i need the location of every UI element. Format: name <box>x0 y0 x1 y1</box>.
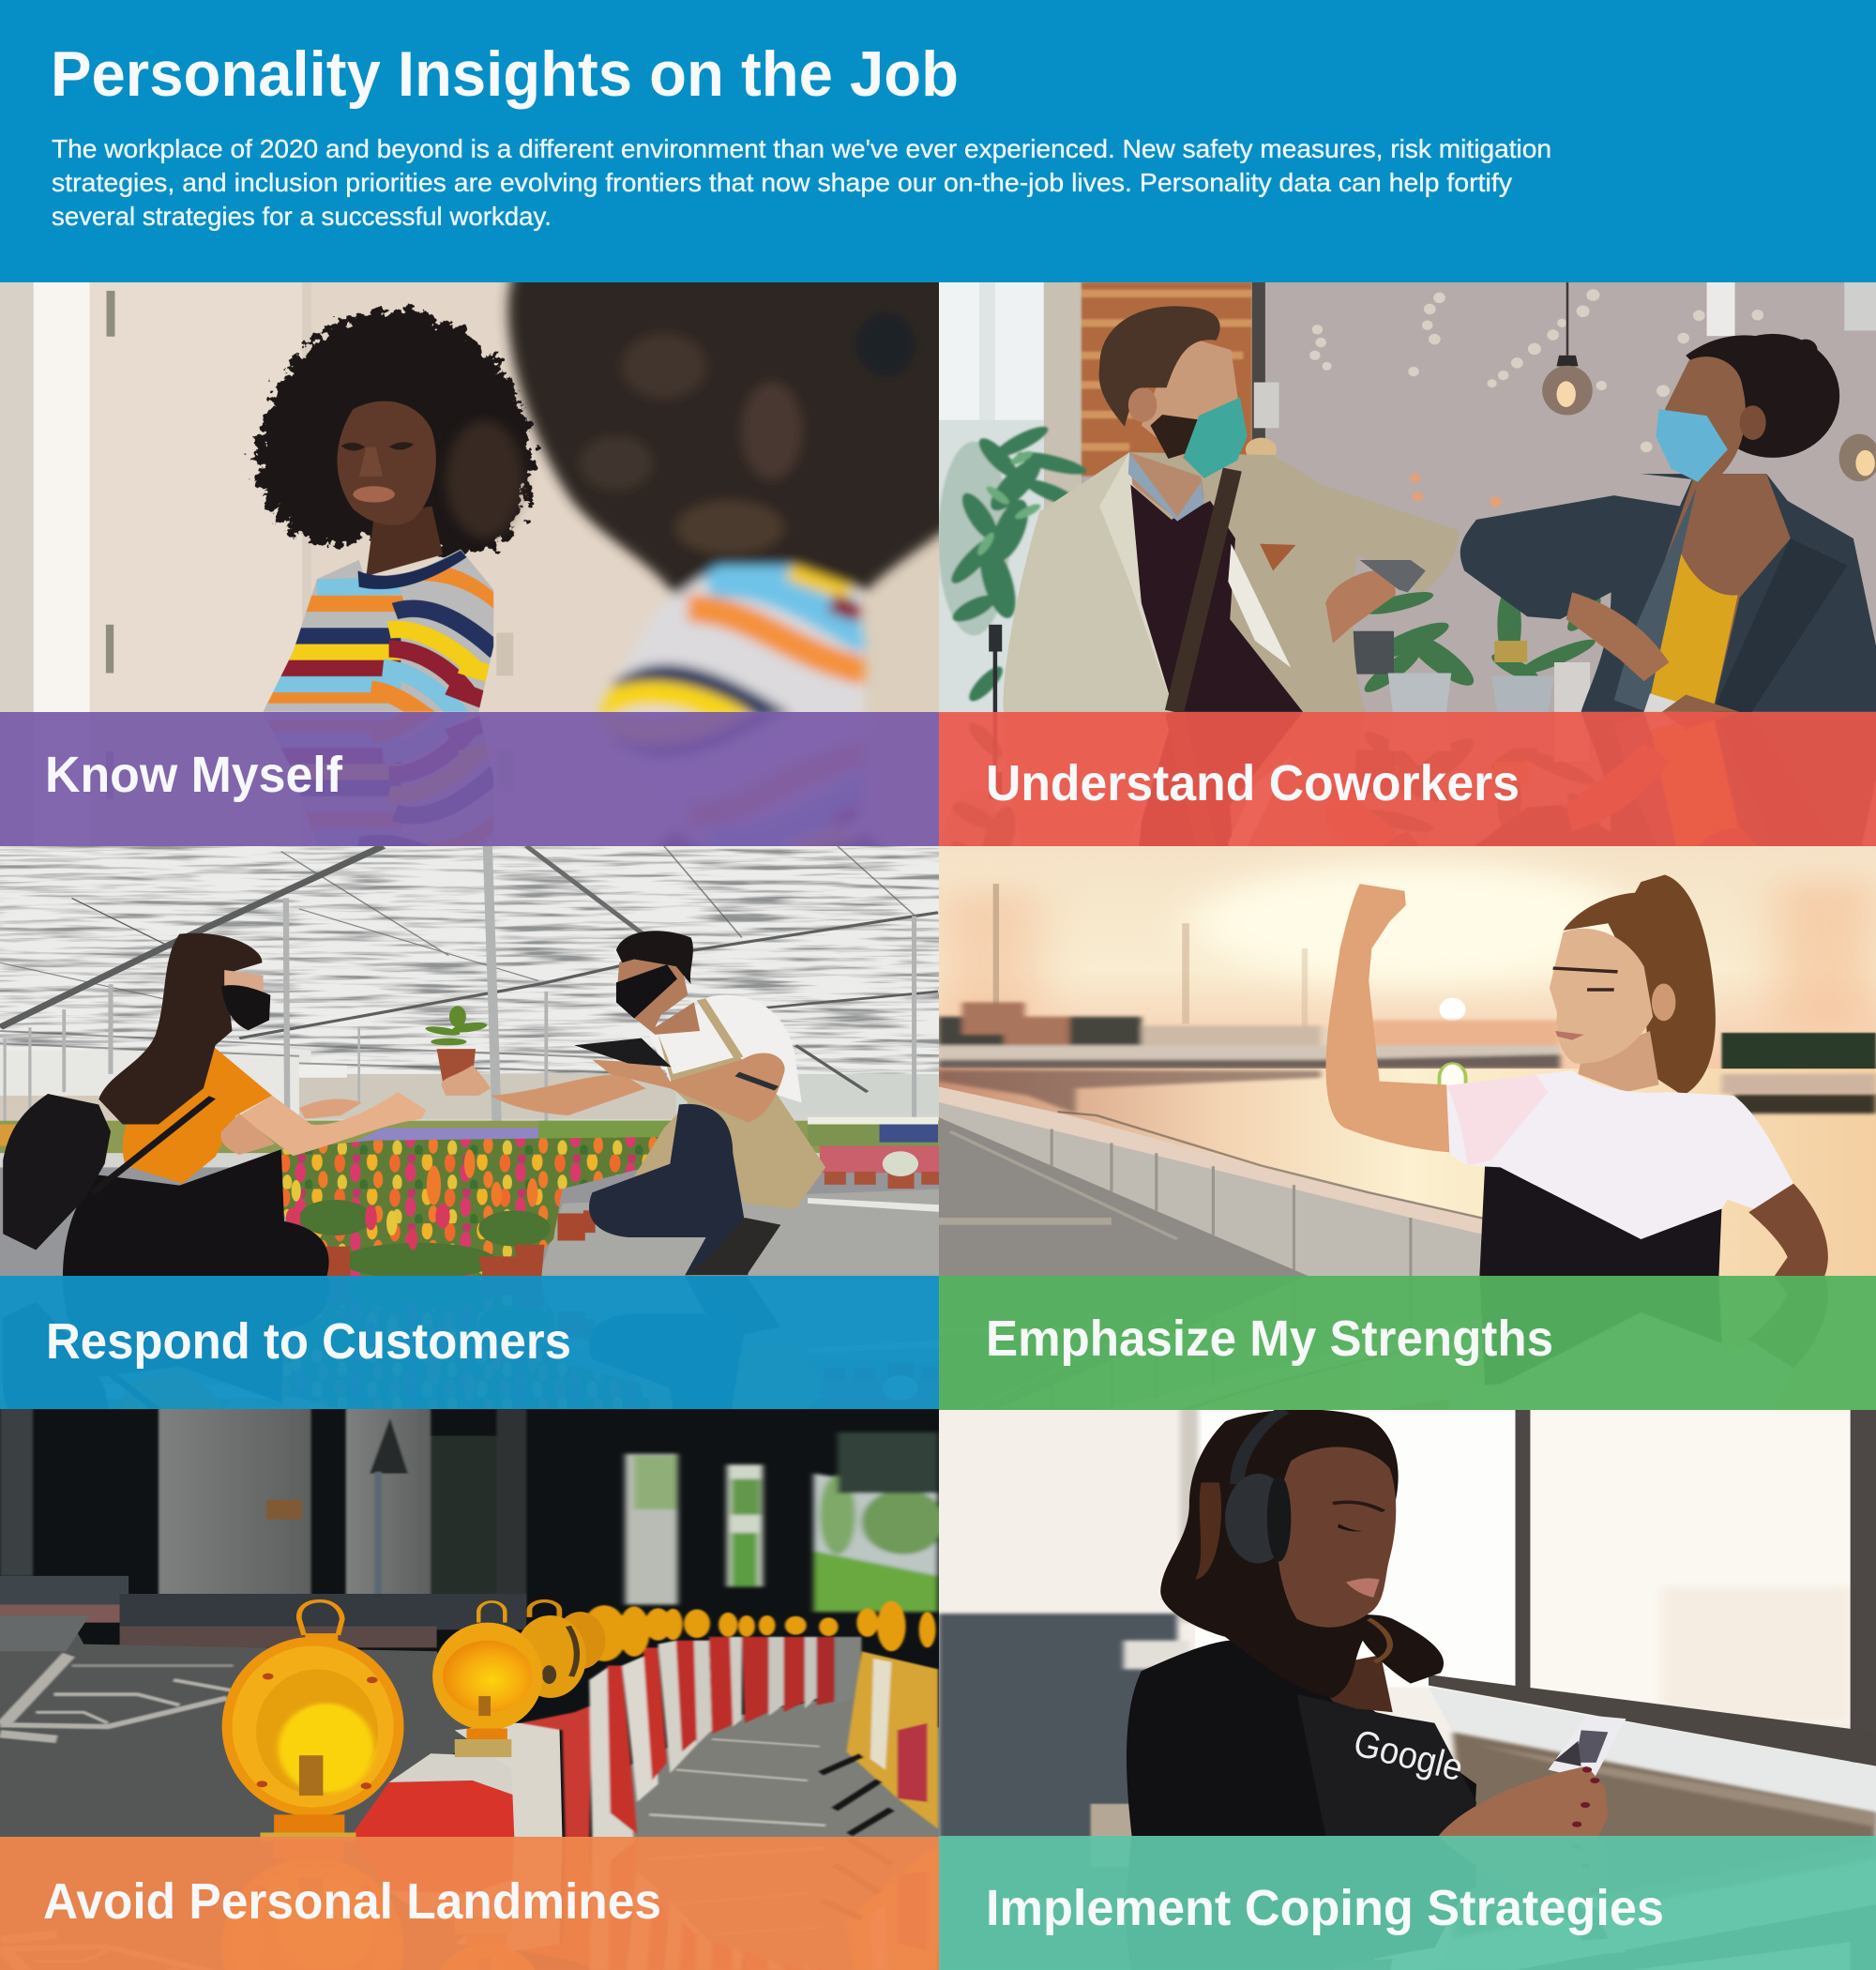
label bar <box>0 1276 939 1409</box>
openings <box>626 1432 946 1612</box>
face <box>1277 1447 1396 1628</box>
reflection under label <box>0 1276 939 1409</box>
photo: customer and florist in greenhouse <box>0 844 946 1279</box>
lights <box>1309 289 1763 452</box>
sharp afro <box>256 309 532 558</box>
label bar <box>0 1837 939 1970</box>
plant in pot <box>424 1006 489 1045</box>
plant left <box>938 421 1088 705</box>
photo: man and woman in masks elbow bump <box>938 282 1876 714</box>
right-hand yellow fence <box>821 1651 938 1834</box>
woman customer <box>63 1149 329 1279</box>
floor <box>0 1167 946 1279</box>
backpack <box>3 1094 111 1250</box>
panel: implement coping strategies <box>938 1407 1876 1970</box>
mask: teal <box>1183 398 1248 478</box>
other arm <box>1748 1184 1828 1279</box>
chest and neckline <box>1309 1655 1393 1712</box>
neck <box>366 507 443 576</box>
potted plants <box>1359 587 1606 698</box>
blurred reflection <box>508 269 969 721</box>
face <box>337 402 436 525</box>
panel: emphasize my strengths <box>938 844 1876 1410</box>
promenade wall <box>938 1086 1489 1279</box>
shirt logo: Google <box>1350 1722 1467 1789</box>
reflection under label <box>939 712 1876 846</box>
heading: Implement Coping Strategies <box>986 1880 1664 1936</box>
label bar <box>939 1836 1876 1970</box>
heading: Avoid Personal Landmines <box>43 1873 661 1930</box>
title: Personality Insights on the Job <box>51 38 959 110</box>
barrier row <box>347 1781 515 1841</box>
intro text <box>52 134 1551 231</box>
reflection under label <box>0 712 939 846</box>
label bar <box>939 1276 1876 1410</box>
water <box>938 1068 1876 1280</box>
headphones <box>1237 1410 1285 1484</box>
label bar <box>0 712 939 846</box>
road <box>0 1623 478 1841</box>
photo: woman with headphones looking at phone by a window <box>938 1407 1876 1843</box>
guard rail <box>0 1576 129 1608</box>
intro text: The workplace of 2020 and beyond is a different environment than we've ever experienced. New safety measures, risk mitigation <box>52 134 1551 163</box>
city skyline <box>938 1002 1560 1068</box>
hair <box>1160 1409 1444 1698</box>
label bar <box>939 712 1876 846</box>
roof beams <box>0 846 938 1092</box>
sidewalk <box>598 1694 946 1841</box>
hand and phone <box>1549 1715 1626 1781</box>
reflection under label <box>0 1837 939 1970</box>
photo: amber warning beacons on road barriers <box>0 1407 946 1841</box>
beacon 3 <box>515 1601 605 1698</box>
distant beacons <box>582 1601 936 1661</box>
pendant lamp <box>1566 282 1568 356</box>
pots on the right <box>820 1145 946 1173</box>
man <box>1004 452 1459 712</box>
panel: understand coworkers <box>938 282 1876 846</box>
planting beds <box>0 1121 946 1153</box>
intro text: several strategies for a successful workday. <box>52 202 552 231</box>
woman <box>1460 474 1876 712</box>
heading: Know Myself <box>45 747 343 803</box>
header band <box>0 0 1876 282</box>
reflection under label <box>939 1836 1876 1970</box>
neck <box>1578 1031 1659 1092</box>
photo: woman flexing at sunset waterfront <box>938 844 1876 1280</box>
sill and bench <box>1429 1688 1876 1816</box>
mask: blue <box>1656 409 1728 482</box>
t-shirt and top <box>1479 1157 1722 1279</box>
hair <box>1564 875 1716 1096</box>
reflection under label <box>939 1276 1876 1410</box>
heading: Respond to Customers <box>46 1313 571 1370</box>
distant trees <box>1722 1033 1876 1074</box>
heading: Emphasize My Strengths <box>986 1311 1553 1367</box>
beacon 1 <box>222 1601 404 1841</box>
photo: woman with afro and striped sweater at a mirror <box>0 269 969 724</box>
panel: know myself <box>0 269 969 846</box>
man florist <box>649 995 802 1103</box>
beacon 2 <box>432 1601 542 1757</box>
grey seat <box>938 1614 1177 1843</box>
panel: avoid personal landmines <box>0 1407 946 1970</box>
window frame <box>1515 1407 1530 1690</box>
striped sweater <box>257 544 500 724</box>
jacket <box>1127 1640 1476 1841</box>
face <box>1550 929 1653 1064</box>
intro text: strategies, and inclusion priorities are evolving frontiers that now shape our on-the-job lives. Personality data can help fortify <box>52 168 1512 197</box>
flower field <box>281 1137 673 1279</box>
arm <box>1325 884 1467 1153</box>
panel: respond to customers <box>0 844 946 1409</box>
heading: Understand Coworkers <box>986 755 1520 811</box>
